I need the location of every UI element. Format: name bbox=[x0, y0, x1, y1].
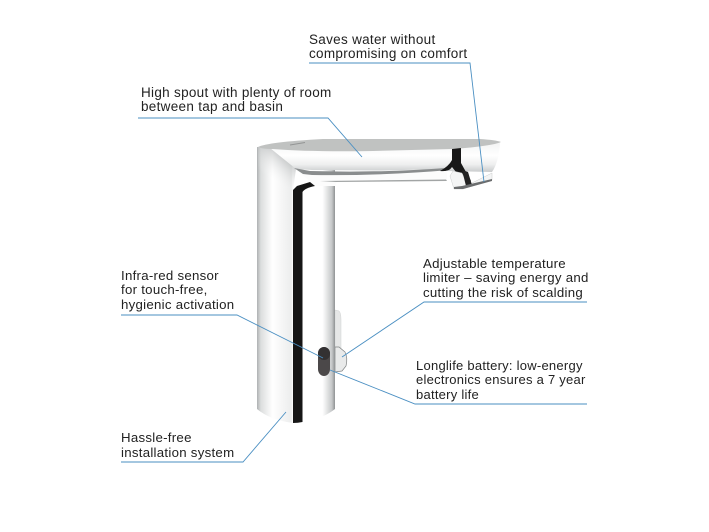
callout: temperature limiter bbox=[342, 256, 589, 357]
callout: temperature limiter: cutting the risk of scalding bbox=[423, 285, 583, 300]
black reflection stripe bbox=[293, 182, 315, 423]
callout: high spout: between tap and basin bbox=[141, 99, 283, 114]
callout: high spout: High spout with plenty of room bbox=[141, 85, 332, 100]
callout: saves water: compromising on comfort bbox=[309, 46, 467, 61]
callout: installation system: Hassle-free bbox=[121, 430, 192, 445]
logo mark bbox=[290, 142, 305, 145]
underside of spout bbox=[296, 169, 447, 186]
callout: infra-red sensor bbox=[121, 268, 323, 358]
tap illustration bbox=[257, 139, 501, 423]
tap body bbox=[257, 147, 335, 423]
tap top surface bbox=[258, 139, 501, 151]
callout: longlife battery bbox=[330, 358, 587, 404]
callout: high spout bbox=[138, 85, 362, 157]
callout: infra-red sensor: for touch-free, bbox=[121, 282, 208, 297]
callout: longlife battery: Longlife battery: low-energy bbox=[416, 358, 583, 373]
callout: longlife battery: electronics ensures a 7 year bbox=[416, 372, 586, 387]
tap rear bracket bbox=[335, 310, 341, 352]
callout: saves water: Saves water without bbox=[309, 32, 436, 47]
nozzle bbox=[450, 171, 492, 189]
tap side knob bbox=[335, 347, 347, 372]
spout reflection bbox=[440, 148, 471, 184]
elbow shading bbox=[258, 148, 296, 190]
callout: temperature limiter: Adjustable temperature bbox=[423, 256, 566, 271]
callout: saves water bbox=[309, 32, 484, 182]
tap head chrome bbox=[268, 142, 500, 172]
callout: infra-red sensor: hygienic activation bbox=[121, 297, 234, 312]
callout: installation system bbox=[121, 412, 286, 462]
callout: temperature limiter: limiter – saving energy and bbox=[423, 270, 589, 285]
callout: infra-red sensor: Infra-red sensor bbox=[121, 268, 219, 283]
callout: installation system: installation system bbox=[121, 445, 234, 460]
callout: longlife battery: battery life bbox=[416, 387, 479, 402]
infra-red sensor bbox=[318, 347, 330, 376]
